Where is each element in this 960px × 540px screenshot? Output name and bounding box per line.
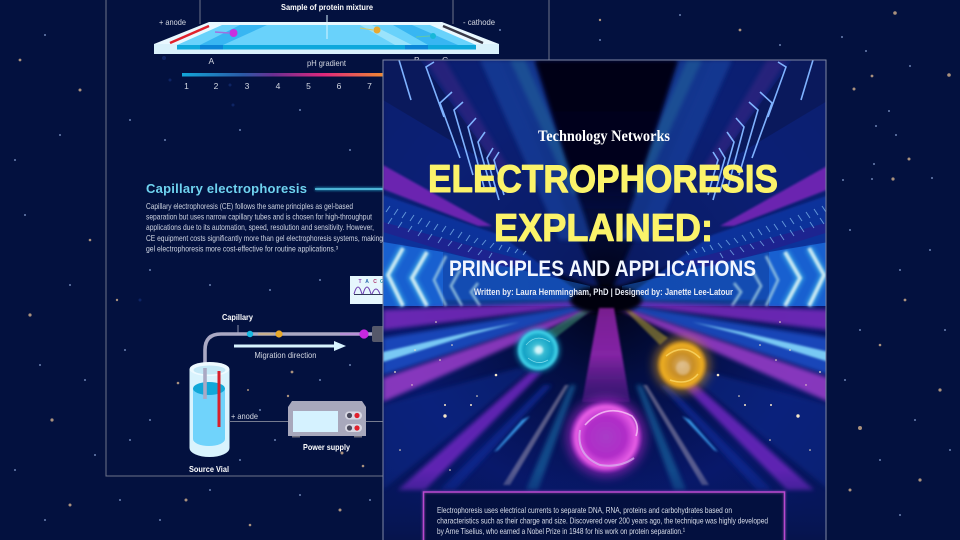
pH scale numbers: 5: [306, 81, 311, 91]
gel tray illustration: [154, 15, 499, 54]
subtitle: PRINCIPLES AND APPLICATIONS: [449, 256, 756, 281]
front panel: poster cover: [383, 60, 829, 540]
icon: chromatogram readout: T: [358, 279, 362, 285]
title: [428, 158, 778, 250]
panel outline: [106, 0, 549, 476]
label: sample of protein mixture: Sample of protein mixture: [281, 2, 373, 12]
intro text: characteristics such as their charge and size. Discovered over 200 years ago, the technique was highly developed: [437, 516, 768, 526]
back panel: lower page of infographic: [106, 0, 549, 476]
poster border: [383, 60, 826, 540]
body text: capillary: applications due to its automation, speed, resolution and sensitivity. However,: [146, 222, 374, 232]
icon: chromatogram readout: G: [380, 279, 384, 285]
body text: capillary: separation but uses narrow capillary tubes and is chosen for high-throughput: [146, 212, 373, 222]
green streak: [547, 310, 590, 338]
capillary tube with analytes: [205, 325, 385, 399]
poster artwork: [383, 60, 829, 540]
icon: chromatogram readout: [350, 276, 385, 304]
label: pH gradient: pH gradient: [307, 58, 347, 68]
label: C: C: [442, 55, 448, 65]
pH scale numbers: 1: [184, 81, 189, 91]
pH scale numbers: 2: [214, 81, 219, 91]
label: capillary: Capillary: [222, 312, 253, 322]
sphere: gold: [654, 337, 710, 393]
label: cathode: - cathode: [463, 17, 495, 27]
dark vanishing point: [570, 286, 642, 314]
sphere: magenta: [566, 397, 646, 477]
body text: capillary: gel electrophoresis more cost-effective for routine applications.³: [146, 244, 338, 254]
central purple beam: [582, 308, 630, 402]
pH scale numbers: 4: [276, 81, 281, 91]
byline: Written by: Laura Hemmingham, PhD | Designed by: Janette Lee-Latour: [474, 287, 733, 297]
label: B: B: [414, 55, 420, 65]
label: power supply: Power supply: [303, 442, 350, 452]
bottom floor fade: [383, 470, 826, 540]
label: migration direction: Migration direction: [254, 350, 317, 360]
intro text: [437, 505, 768, 536]
sphere: cyan: [515, 327, 561, 373]
body text: capillary: Capillary electrophoresis (CE) follows the same principles as gel-based: [146, 201, 353, 211]
intro box: [424, 492, 784, 540]
pH scale numbers: 3: [245, 81, 250, 91]
label: A: A: [208, 56, 214, 66]
body text: capillary: CE equipment costs significantly more than gel electrophoresis systems, making: [146, 233, 383, 243]
pH scale numbers: [184, 81, 372, 91]
body text: capillary: [146, 201, 383, 254]
title: EXPLAINED:: [494, 207, 713, 250]
left tunnel art: [383, 60, 600, 490]
wire: [229, 420, 385, 422]
label: anode bottom: + anode: [231, 411, 258, 421]
heading rule: [315, 187, 385, 191]
label: anode top: + anode: [159, 17, 186, 27]
label: source vial: Source Vial: [189, 464, 229, 474]
power supply: [288, 401, 366, 438]
title: ELECTROPHORESIS: [428, 158, 778, 201]
right tunnel art: [612, 60, 829, 490]
intro text: Electrophoresis uses electrical currents to separate DNA, RNA, proteins and carbohydrates based on: [437, 505, 732, 515]
heading: capillary electrophoresis: Capillary electrophoresis: [146, 181, 307, 196]
intro text: by Arne Tiselius, who earned a Nobel Prize in 1948 for his work on protein separation.¹: [437, 526, 685, 536]
icon: chromatogram readout: A: [365, 279, 369, 285]
poster sparkles: [394, 321, 821, 471]
pH scale numbers: 6: [337, 81, 342, 91]
arrow: migration direction: [234, 341, 346, 351]
pH scale numbers: 7: [367, 81, 372, 91]
icon: chromatogram readout: C: [373, 279, 377, 285]
amber streak: [626, 309, 668, 346]
central dark top glow: [535, 60, 678, 215]
pH gradient bar: [182, 73, 385, 76]
source vial: [190, 362, 230, 457]
logo: Technology Networks: Technology Networks: [538, 128, 670, 145]
